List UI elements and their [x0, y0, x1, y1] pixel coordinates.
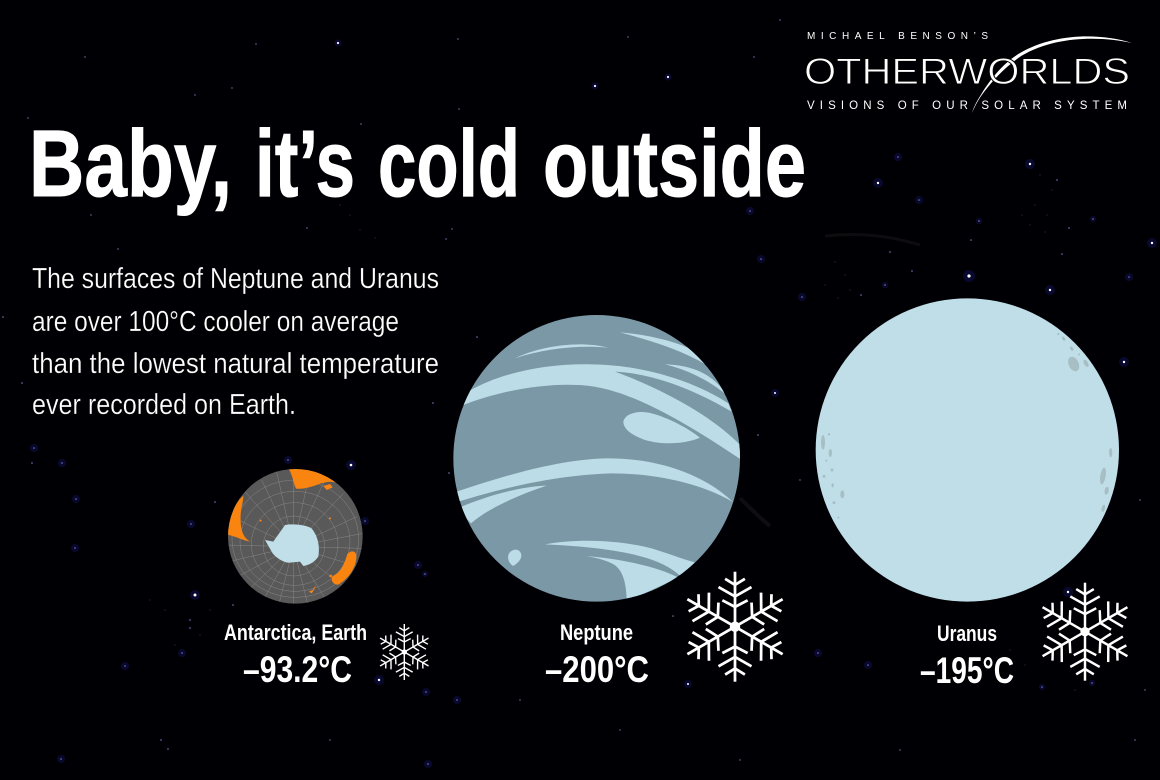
label: Uranus	[920, 621, 1014, 691]
Antarctica	[265, 524, 319, 566]
intro text: ever recorded on Earth.	[32, 389, 296, 421]
label: Neptune: Neptune	[560, 620, 633, 645]
title: it’s	[255, 111, 355, 217]
label: Antarctica: Antarctica, Earth	[224, 620, 367, 645]
logo: Michael Benson's Otherworlds: MICHAEL BENSON’S	[807, 31, 988, 42]
label: Uranus: Uranus	[937, 621, 997, 646]
logo: Michael Benson's Otherworlds: VISIONS OF OUR SOLAR SYSTEM	[807, 100, 1127, 112]
planet: Neptune	[453, 315, 742, 602]
intro text: The surfaces of Neptune and Uranus	[32, 263, 439, 295]
label: Antarctica: –93.2°C	[243, 649, 352, 690]
planet: Earth, Antarctic view	[227, 468, 363, 607]
title	[29, 111, 806, 217]
label: Neptune: –200°C	[545, 649, 649, 690]
label: Neptune	[545, 620, 649, 690]
intro text	[32, 263, 439, 421]
icon: large snowflake, Neptune	[679, 572, 791, 682]
logo swoosh	[972, 36, 1132, 113]
label: Uranus: –195°C	[920, 650, 1014, 691]
planet: Uranus	[816, 298, 1119, 602]
title: cold	[378, 111, 520, 217]
title: Baby,	[29, 111, 232, 217]
logo: Michael Benson's Otherworlds: OTHERWORLDS	[804, 51, 1130, 92]
logo: Michael Benson's Otherworlds	[804, 31, 1132, 113]
icon: small snowflake	[376, 624, 433, 680]
intro text: are over 100°C cooler on average	[32, 306, 399, 338]
icon: large snowflake, Uranus	[1035, 583, 1135, 681]
label: Antarctica	[224, 620, 367, 690]
intro text: than the lowest natural temperature	[32, 348, 439, 380]
title: outside	[543, 111, 806, 217]
